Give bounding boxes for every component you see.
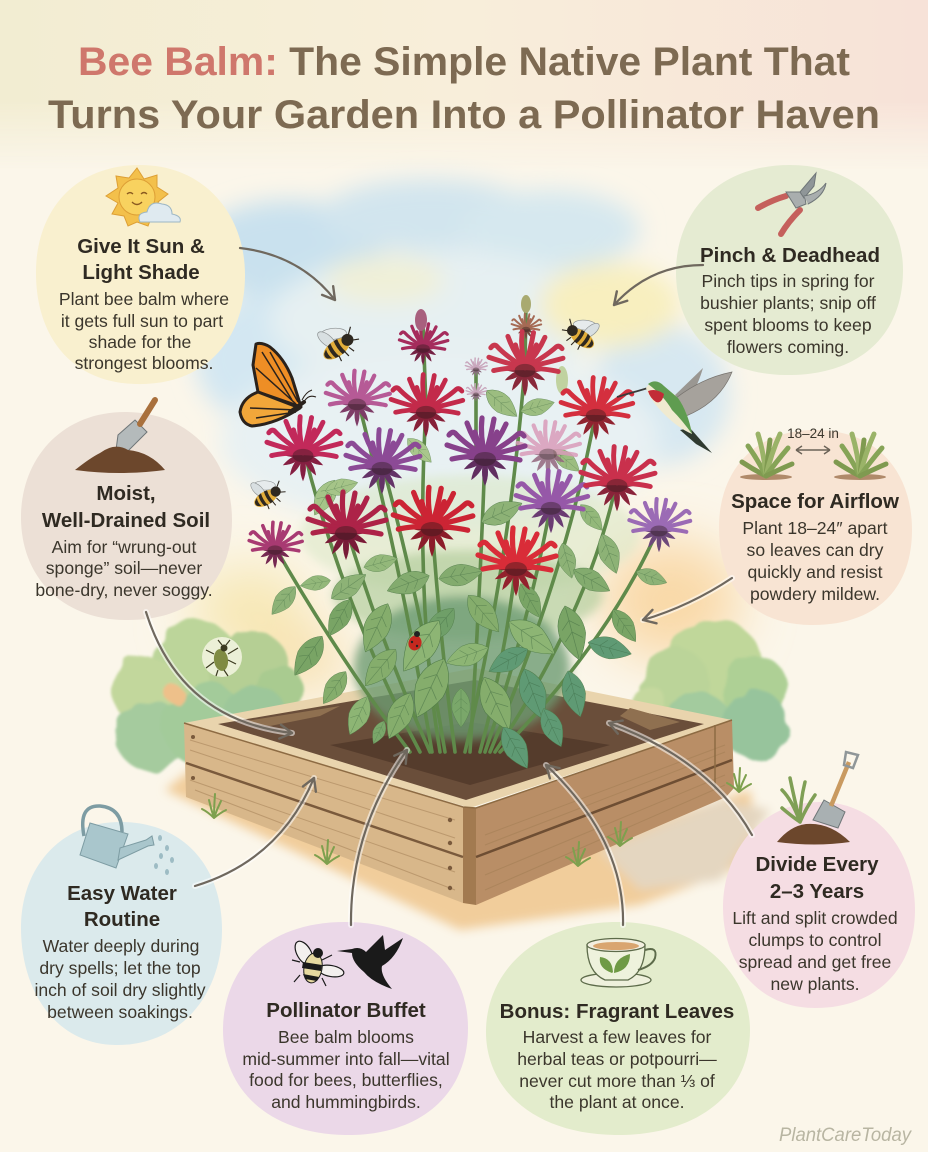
- icon: trowel in soil: [75, 400, 165, 473]
- body text: Harvest a few leaves for: [523, 1027, 711, 1047]
- body text: [700, 271, 876, 357]
- icon: watering can: [80, 806, 174, 875]
- body text: inch of soil dry slightly: [34, 980, 206, 1000]
- body text: clumps to control: [749, 930, 881, 950]
- panel: moist soil: Moist,: [96, 482, 156, 505]
- grass tufts: [202, 768, 751, 866]
- panel: space for airflow: Space for Airflow: [731, 490, 899, 513]
- panel: divide every 2-3 years: [723, 752, 915, 1008]
- panel: easy water routine: Easy Water: [67, 882, 177, 905]
- watercolor sky: [190, 179, 740, 690]
- body text: Plant 18–24″ apart: [742, 518, 888, 538]
- body text: [59, 289, 229, 373]
- panel: give it sun: [36, 165, 245, 384]
- raised wooden bed: [184, 668, 734, 905]
- body text: so leaves can dry: [747, 540, 884, 560]
- panel: pollinator buffet: Pollinator Buffet: [266, 999, 426, 1022]
- icon: hummingbird: [617, 368, 732, 453]
- body text: powdery mildew.: [750, 584, 880, 604]
- body text: dry spells; let the top: [39, 958, 201, 978]
- icon: pruners: [758, 173, 826, 234]
- title wash: [0, 0, 928, 146]
- body text: Aim for “wrung-out: [52, 537, 196, 557]
- foliage mass: [300, 475, 640, 740]
- body text: herbal teas or potpourri—: [517, 1049, 717, 1069]
- body text: [742, 518, 888, 604]
- body text: new plants.: [770, 974, 860, 994]
- body text: food for bees, butterflies,: [249, 1070, 443, 1090]
- body text: spread and get free: [739, 952, 891, 972]
- body text: sponge” soil—never: [46, 558, 202, 578]
- body text: bushier plants; snip off: [700, 293, 876, 313]
- heading: Give It Sun &: [77, 235, 205, 258]
- title: Bee Balm: The Simple Native Plant That: [78, 40, 850, 84]
- icon: shovel and plant: [777, 752, 858, 844]
- body text: the plant at once.: [550, 1092, 684, 1112]
- body text: [732, 908, 898, 994]
- panel: moist soil: [21, 400, 232, 620]
- body text: and hummingbirds.: [271, 1092, 421, 1112]
- panel: pinch and deadhead: Pinch & Deadhead: [700, 244, 880, 267]
- body text: quickly and resist: [748, 562, 883, 582]
- body text: Water deeply during: [43, 936, 199, 956]
- panel: easy water routine: [21, 806, 222, 1045]
- panel shape: [36, 165, 245, 384]
- body text: [35, 537, 213, 600]
- bee balm plant: [249, 295, 690, 774]
- icon: two plants with spacing: [740, 434, 886, 480]
- icon: beetle: [202, 637, 242, 677]
- body text: shade for the: [89, 332, 191, 352]
- body text: Pinch tips in spring for: [701, 271, 875, 291]
- title: [48, 40, 880, 137]
- icon: ladybug: [407, 631, 423, 652]
- panel: space for airflow: [719, 426, 912, 625]
- body text: flowers coming.: [727, 337, 849, 357]
- body text: [34, 936, 206, 1022]
- icon: monarch butterfly: [240, 343, 316, 426]
- panel: divide every 2-3 years: Divide Every: [755, 853, 879, 876]
- body text: bone-dry, never soggy.: [35, 580, 213, 600]
- heading line 2: Light Shade: [82, 261, 200, 284]
- icon: bee upper left: [310, 314, 364, 368]
- panel: pollinator buffet: [223, 922, 468, 1135]
- body text: never cut more than ⅓ of: [519, 1071, 715, 1091]
- icon: bee upper right: [558, 308, 606, 356]
- body text: Lift and split crowded: [732, 908, 898, 928]
- background bush right: [632, 619, 789, 759]
- body text: it gets full sun to part: [61, 311, 223, 331]
- background bush left: [111, 620, 304, 770]
- icon: bee and hummingbird: [291, 935, 403, 989]
- body text: between soakings.: [47, 1002, 193, 1022]
- arrows: [146, 248, 752, 925]
- icon: sun and cloud: [106, 168, 180, 226]
- leaves: [265, 383, 669, 774]
- body text: [517, 1027, 717, 1112]
- icon: bee left: [244, 469, 289, 514]
- panel: divide every 2-3 years: 2–3 Years: [770, 880, 864, 903]
- body text: [242, 1027, 450, 1112]
- ground wash: [165, 770, 770, 930]
- body text: spent blooms to keep: [704, 315, 872, 335]
- stems: [275, 305, 659, 752]
- body text: mid-summer into fall—vital: [242, 1049, 450, 1069]
- panel: bonus fragrant leaves: [486, 922, 750, 1135]
- panel: moist soil: Well-Drained Soil: [42, 509, 210, 532]
- body text: Plant bee balm where: [59, 289, 229, 309]
- flowers: [249, 295, 690, 596]
- panel: space for airflow: 18–24 in: [787, 426, 839, 441]
- panel: bonus fragrant leaves: Bonus: Fragrant Leaves: [500, 1000, 734, 1023]
- watermark: PlantCareToday: [779, 1125, 912, 1146]
- body text: strongest blooms.: [75, 353, 213, 373]
- title: Turns Your Garden Into a Pollinator Haven: [48, 93, 880, 137]
- panel: pinch and deadhead: [676, 165, 903, 375]
- panel: easy water routine: Routine: [84, 908, 160, 931]
- body text: Bee balm blooms: [278, 1027, 414, 1047]
- icon: tea cup: [581, 938, 656, 987]
